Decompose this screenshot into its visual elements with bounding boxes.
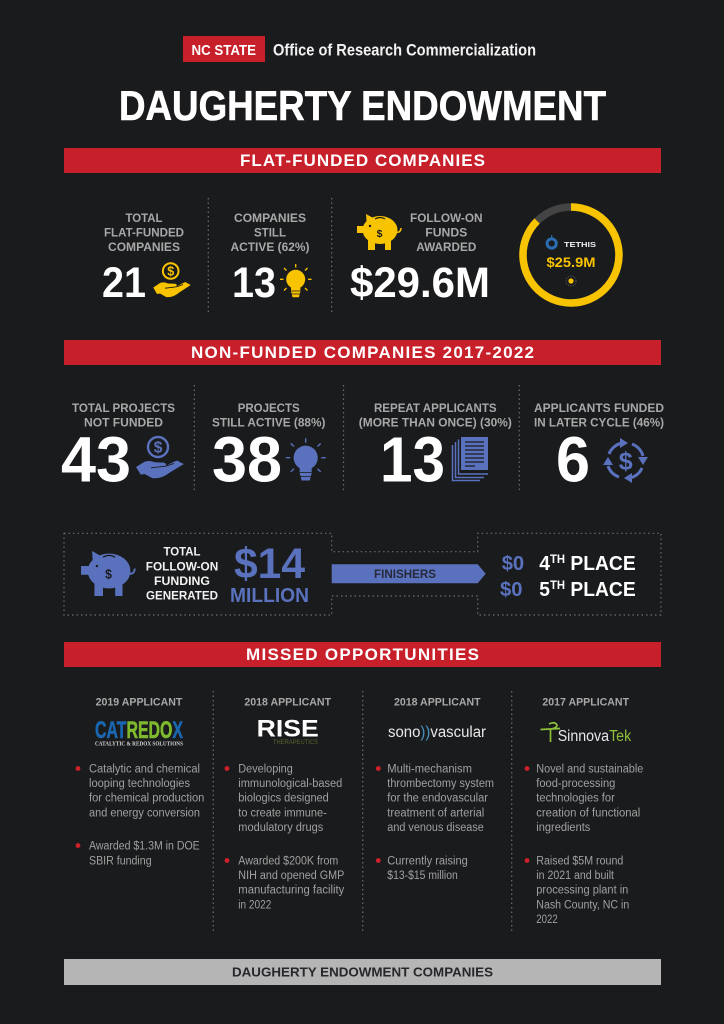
section heading: flat-funded companies: FLAT-FUNDED COMPANIES bbox=[240, 151, 485, 170]
divider bbox=[194, 385, 519, 490]
column: Catredox: looping technologies bbox=[89, 778, 190, 790]
stat: total projects not funded bbox=[61, 401, 184, 496]
stat: projects still active bbox=[212, 401, 326, 496]
stat: companies still active: ACTIVE (62%) bbox=[230, 240, 310, 254]
title: DAUGHERTY ENDOWMENT bbox=[119, 82, 606, 129]
stat: companies still active: 13 bbox=[232, 259, 276, 307]
column: Sonovascular bbox=[376, 697, 494, 882]
text: total follow-on funding generated bbox=[146, 545, 218, 603]
logo: Rise Therapeutics: RISE bbox=[257, 716, 319, 743]
stat: companies still active: STILL bbox=[254, 226, 286, 240]
logo: Catredox: CATALYTIC & REDOX SOLUTIONS bbox=[95, 742, 183, 748]
column: SinnovaTek: processing plant in bbox=[536, 885, 628, 897]
column: Rise Therapeutics: NIH and opened GMP bbox=[238, 870, 345, 882]
stat: applicants funded in later cycle: IN LATER CYCLE (46%) bbox=[534, 416, 664, 430]
icon: small sun bbox=[566, 276, 576, 286]
stat: projects still active: 38 bbox=[212, 424, 282, 496]
column: Catredox: Catalytic and chemical bbox=[89, 763, 200, 775]
icon: hand with coin: $ bbox=[154, 440, 163, 456]
amount: 14 million bbox=[230, 540, 309, 607]
stat: repeat applicants: 13 bbox=[380, 424, 445, 496]
footer bar: DAUGHERTY ENDOWMENT COMPANIES bbox=[232, 966, 493, 980]
stat: total projects not funded: TOTAL PROJECTS bbox=[72, 401, 175, 415]
finishers list: PLACE bbox=[565, 552, 636, 575]
icon: piggy bank: $ bbox=[105, 567, 112, 582]
column: Catredox: SBIR funding bbox=[89, 855, 152, 867]
logo: Tethis: TETHIS bbox=[564, 240, 596, 249]
column: Catredox: for chemical production bbox=[89, 793, 204, 805]
footer bar bbox=[64, 959, 661, 985]
finishers list: PLACE bbox=[565, 578, 636, 601]
logo: Sonovascular: sono))vascular bbox=[388, 724, 486, 741]
column: Rise Therapeutics: manufacturing facility bbox=[238, 885, 345, 897]
arrow: finishers: FINISHERS bbox=[374, 567, 436, 581]
column: SinnovaTek: food-processing bbox=[536, 778, 615, 790]
column: Sonovascular: Multi-mechanism bbox=[387, 763, 472, 775]
column: Catredox: Awarded $1.3M in DOE bbox=[89, 841, 200, 853]
donut chart: Tethis share bbox=[523, 207, 619, 303]
column: Rise Therapeutics bbox=[225, 697, 345, 911]
section heading: flat-funded companies bbox=[64, 148, 661, 173]
text: total follow-on funding generated: TOTAL bbox=[164, 545, 200, 559]
column: SinnovaTek: creation of functional bbox=[536, 807, 640, 819]
header: office name: Office of Research Commercialization bbox=[273, 40, 536, 60]
header logo: NC State bbox=[183, 36, 265, 62]
icon: light bulb bbox=[280, 264, 312, 297]
column: Rise Therapeutics: immunological-based bbox=[238, 778, 342, 790]
section heading: non-funded companies bbox=[64, 340, 661, 365]
column: Rise Therapeutics: to create immune- bbox=[238, 807, 327, 819]
stat: follow-on funds awarded: FUNDS bbox=[425, 226, 467, 240]
finishers list: $0 bbox=[500, 578, 522, 601]
stat: projects still active: PROJECTS bbox=[238, 401, 300, 415]
stat: total flat-funded companies: COMPANIES bbox=[108, 240, 180, 254]
column: Rise Therapeutics: Awarded $200K from bbox=[238, 855, 338, 867]
column: Catredox bbox=[76, 697, 204, 867]
logo: Catredox: CATREDOX bbox=[95, 717, 183, 744]
stat: companies still active: COMPANIES bbox=[234, 211, 306, 225]
column: SinnovaTek: 2022 bbox=[536, 914, 558, 926]
column: SinnovaTek: 2017 APPLICANT bbox=[542, 697, 629, 709]
text: total follow-on funding generated: FOLLOW-ON bbox=[146, 560, 218, 574]
finishers list: TH bbox=[550, 578, 565, 592]
column: Sonovascular: 2018 APPLICANT bbox=[394, 697, 481, 709]
stat: total projects not funded: 43 bbox=[61, 424, 131, 496]
stat: repeat applicants: (MORE THAN ONCE) (30%) bbox=[359, 416, 512, 430]
section heading: non-funded companies: NON-FUNDED COMPANIES 2017-2022 bbox=[191, 343, 534, 362]
icon: circular dollar arrows: $ bbox=[619, 448, 633, 476]
logo: SinnovaTek: SinnovaTek bbox=[558, 728, 631, 745]
column: SinnovaTek: ingredients bbox=[536, 822, 591, 834]
stat: total flat-funded companies: 21 bbox=[102, 259, 146, 307]
divider bbox=[208, 198, 332, 315]
finishers list bbox=[500, 552, 636, 601]
donut chart: Tethis share: $25.9M bbox=[546, 254, 596, 270]
stat: total flat-funded companies: TOTAL bbox=[126, 211, 162, 225]
stat: total flat-funded companies: FLAT-FUNDED bbox=[104, 226, 184, 240]
stat: follow-on funds awarded: FOLLOW-ON bbox=[410, 211, 483, 225]
icon: piggy bank bbox=[81, 551, 135, 596]
column: Rise Therapeutics: biologics designed bbox=[238, 793, 329, 805]
section heading: missed opportunities bbox=[64, 642, 661, 667]
stat: repeat applicants: REPEAT APPLICANTS bbox=[374, 401, 497, 415]
arrow: finishers bbox=[332, 564, 486, 583]
stat: follow-on funds awarded: $29.6M bbox=[350, 259, 490, 307]
column: SinnovaTek: in 2021 and built bbox=[536, 870, 615, 882]
column: Rise Therapeutics: in 2022 bbox=[238, 899, 271, 911]
text: total follow-on funding generated: GENERATED bbox=[146, 589, 218, 603]
stat: total projects not funded: NOT FUNDED bbox=[84, 416, 163, 430]
dotted panel: follow-on funding and finishers bbox=[64, 533, 661, 615]
amount: 14 million: $14 bbox=[234, 540, 305, 588]
column: Sonovascular: treatment of arterial bbox=[387, 807, 484, 819]
column: SinnovaTek bbox=[525, 697, 643, 926]
column: SinnovaTek: technologies for bbox=[536, 793, 615, 805]
column: Catredox: 2019 APPLICANT bbox=[96, 697, 183, 709]
stat: companies still active bbox=[230, 211, 312, 307]
finishers list: 5 bbox=[539, 578, 551, 601]
stat: follow-on funds awarded: AWARDED bbox=[416, 240, 477, 254]
finishers list: TH bbox=[550, 552, 565, 566]
column: Catredox: and energy conversion bbox=[89, 807, 200, 819]
text: total follow-on funding generated: FUNDING bbox=[154, 574, 210, 588]
finishers list: $0 bbox=[502, 552, 524, 575]
amount: 14 million: MILLION bbox=[230, 584, 309, 607]
column: Sonovascular: Currently raising bbox=[387, 855, 468, 867]
column: SinnovaTek: Raised $5M round bbox=[536, 855, 623, 867]
stat: projects still active: STILL ACTIVE (88%) bbox=[212, 416, 325, 430]
finishers list: 4 bbox=[539, 552, 551, 575]
column: Rise Therapeutics: Developing bbox=[238, 763, 293, 775]
stat: repeat applicants bbox=[359, 401, 512, 496]
column: Sonovascular: for the endovascular bbox=[387, 793, 488, 805]
icon: document stack bbox=[452, 437, 488, 480]
column: Sonovascular: and venous disease bbox=[387, 822, 484, 834]
column: Rise Therapeutics: modulatory drugs bbox=[238, 822, 324, 834]
column: Rise Therapeutics: 2018 APPLICANT bbox=[244, 697, 331, 709]
icon: light bulb bbox=[286, 438, 326, 480]
stat: applicants funded in later cycle: 6 bbox=[556, 424, 590, 496]
column: SinnovaTek: Novel and sustainable bbox=[536, 763, 643, 775]
logo: Rise Therapeutics: THERAPEUTICS bbox=[273, 740, 318, 746]
column: SinnovaTek: Nash County, NC in bbox=[536, 899, 629, 911]
section heading: missed opportunities: MISSED OPPORTUNITIES bbox=[246, 645, 479, 664]
stat: follow-on funds awarded bbox=[350, 211, 490, 307]
column: Sonovascular: thrombectomy system bbox=[387, 778, 494, 790]
stat: applicants funded in later cycle bbox=[534, 401, 664, 496]
stat: total flat-funded companies bbox=[102, 211, 191, 307]
stat: applicants funded in later cycle: APPLICANTS FUNDED bbox=[534, 401, 664, 415]
divider bbox=[213, 691, 512, 934]
icon: hand with coin: $ bbox=[167, 264, 174, 278]
icon: piggy bank: $ bbox=[377, 228, 383, 240]
logo: SinnovaTek bbox=[540, 723, 631, 745]
column: Sonovascular: $13-$15 million bbox=[387, 870, 458, 882]
header logo: NC State: NC STATE bbox=[192, 42, 256, 59]
